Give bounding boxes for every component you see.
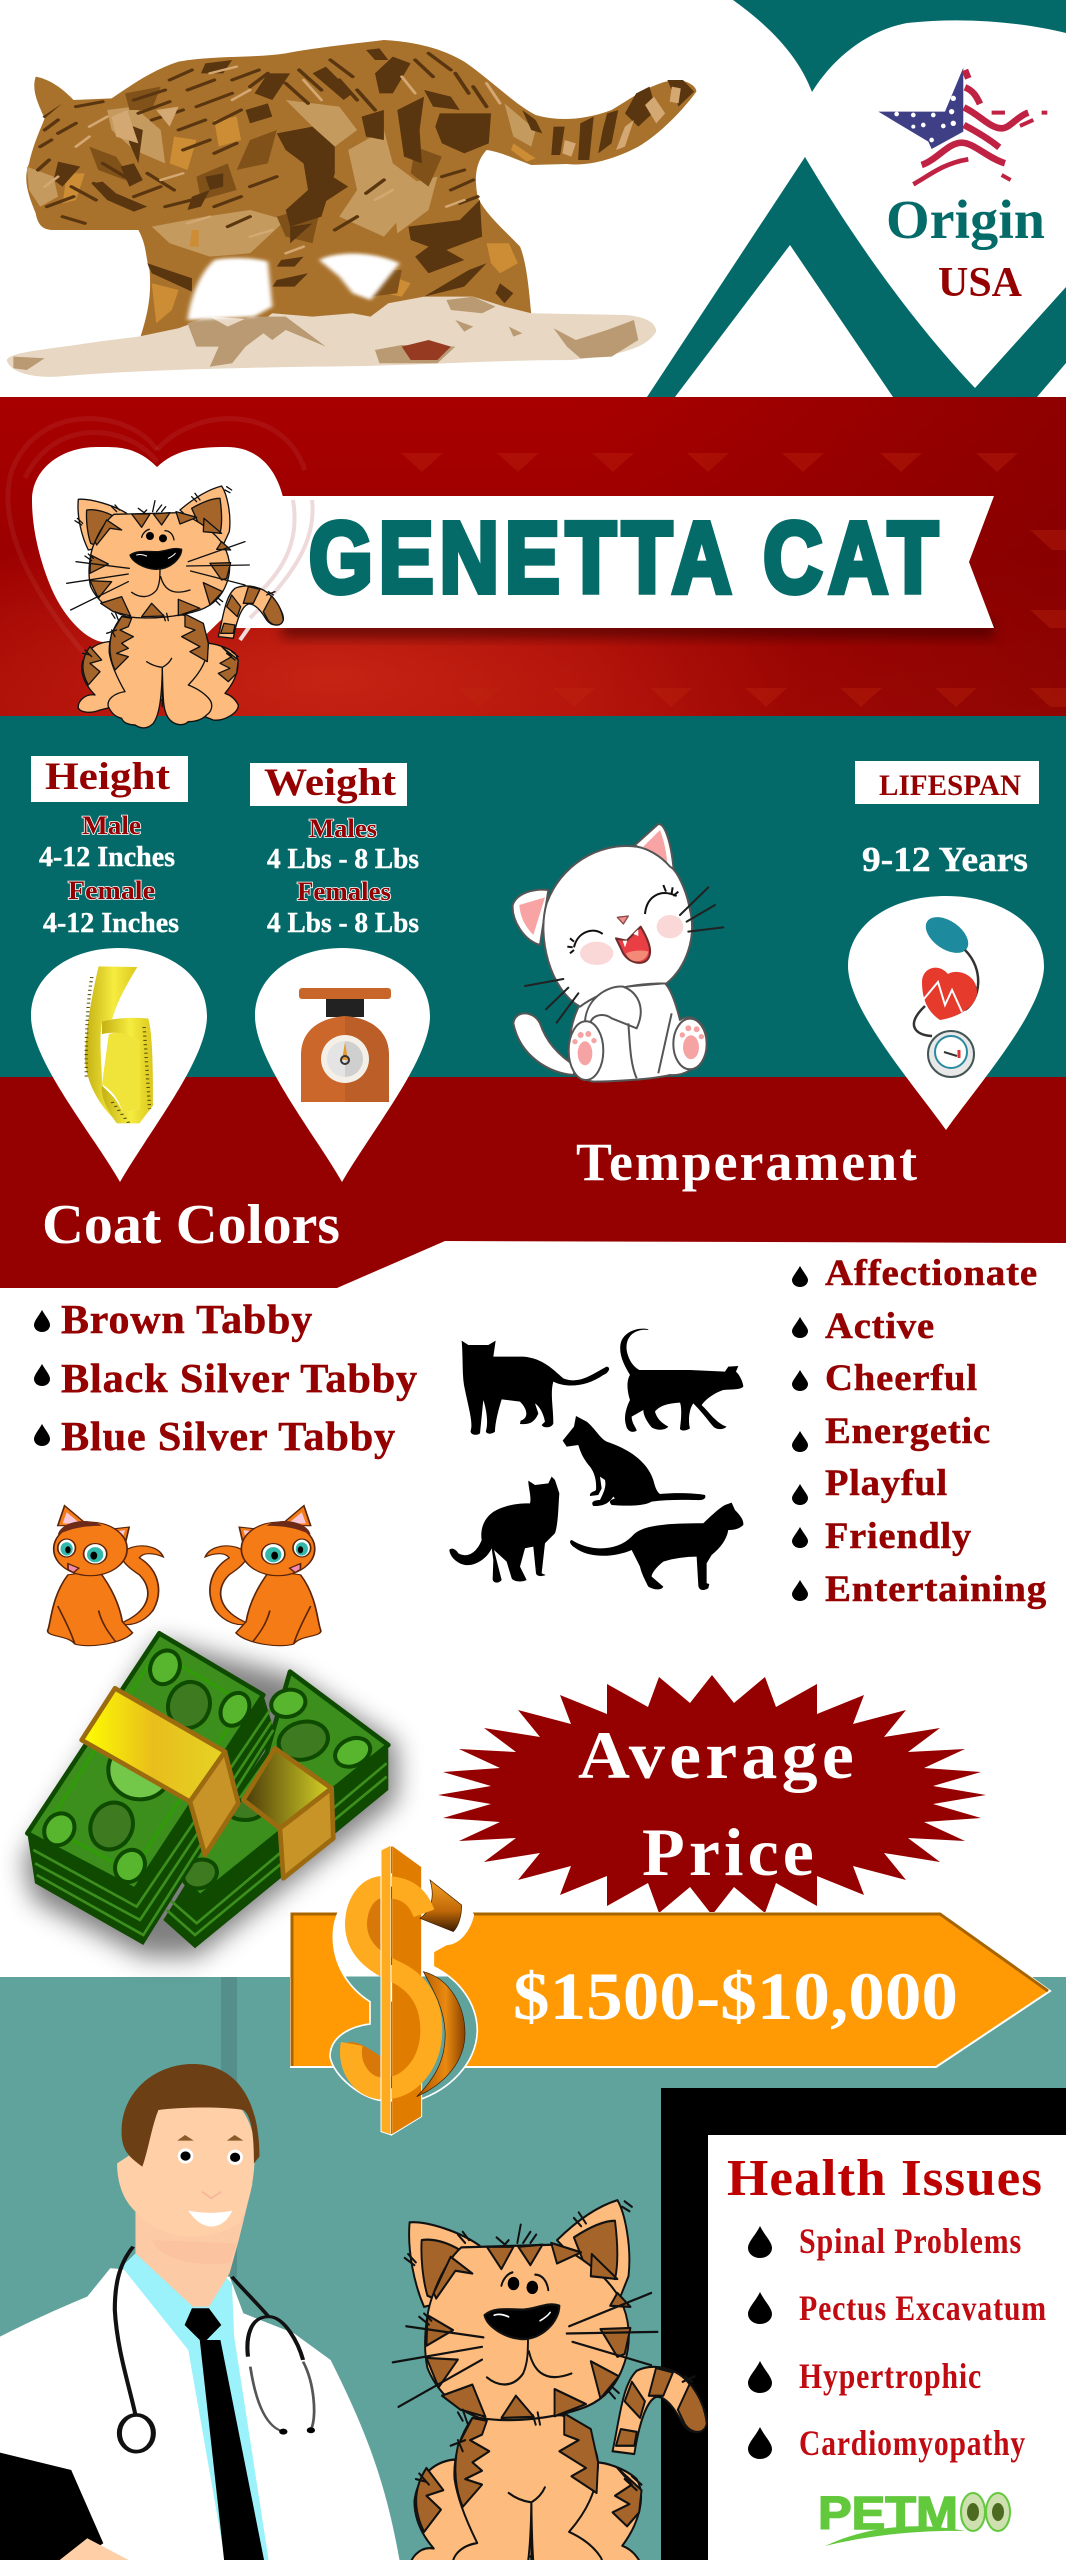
health issues list xyxy=(748,2221,1047,2463)
price text: $1500-$10,000 xyxy=(513,1958,958,2034)
photo: tabby cat walking on snow xyxy=(7,40,696,377)
temperament list: Active xyxy=(825,1306,935,1347)
temperament list: Cheerful xyxy=(825,1358,978,1399)
title ribbon xyxy=(230,496,994,628)
PETMOO logo: OO xyxy=(959,2494,1011,2538)
wall stripe xyxy=(221,1977,237,2277)
average price heading: Price xyxy=(642,1814,818,1890)
icon: USA flag star xyxy=(878,68,1047,184)
origin label: Origin xyxy=(886,189,1045,250)
icon: stacks of money xyxy=(23,1633,397,1957)
height values: Female xyxy=(68,876,155,905)
coat colors list: Blue Silver Tabby xyxy=(61,1413,396,1459)
lifespan value: 9-12 Years xyxy=(862,840,1028,879)
starburst xyxy=(438,1675,986,1915)
average price heading: Average xyxy=(578,1717,858,1793)
snow ground xyxy=(7,297,656,377)
PETMOO logo: PETM xyxy=(818,2487,958,2539)
pin: tape measure xyxy=(31,948,207,1182)
weight values: 4 Lbs - 8 Lbs xyxy=(267,908,419,939)
temperament list: Affectionate xyxy=(825,1253,1038,1294)
teal stats background xyxy=(0,716,1066,1078)
top white section background xyxy=(0,0,1066,398)
temperament list: Friendly xyxy=(825,1516,972,1557)
heart badge xyxy=(32,447,297,650)
laughing white kitten xyxy=(513,824,723,1082)
temperament list: Playful xyxy=(825,1463,948,1504)
ribbon shadow xyxy=(282,620,994,638)
PETMOO logo xyxy=(818,2487,1011,2546)
weight values: Females xyxy=(297,877,391,906)
temperament list: Entertaining xyxy=(825,1569,1047,1610)
pin: kitchen scale xyxy=(255,948,430,1182)
cartoon tabby cat mascot xyxy=(67,486,283,728)
temperament heading: Temperament xyxy=(576,1132,919,1192)
orange cats pair xyxy=(48,1506,321,1646)
weight values: 4 Lbs - 8 Lbs xyxy=(267,844,419,875)
red title banner xyxy=(0,397,1066,720)
weight label: Weight xyxy=(264,761,396,804)
height values xyxy=(39,811,179,939)
white paw patches xyxy=(187,254,400,320)
left orange cat xyxy=(48,1506,163,1646)
height values: 4-12 Inches xyxy=(43,908,179,939)
weight values xyxy=(267,814,419,939)
price arrow xyxy=(291,1913,1050,2067)
height values: 4-12 Inches xyxy=(39,842,175,873)
height values: Male xyxy=(82,811,141,840)
temperament list xyxy=(792,1253,1047,1610)
health issues heading: Health Issues xyxy=(727,2150,1043,2207)
coat colors list: Black Silver Tabby xyxy=(61,1355,418,1401)
coat colors list xyxy=(34,1296,418,1459)
average price heading xyxy=(578,1717,858,1890)
doctor illustration xyxy=(0,2064,400,2560)
right orange cat xyxy=(205,1506,321,1646)
large cartoon tabby cat xyxy=(393,2200,707,2560)
icon: 3D dollar sign xyxy=(330,1845,477,2135)
lower teal background xyxy=(0,1977,1066,2560)
title text: GENETTA CAT xyxy=(309,502,938,614)
origin label: USA xyxy=(938,260,1023,306)
health issues panel frame xyxy=(661,2088,1066,2560)
coat colors list: Brown Tabby xyxy=(61,1296,313,1342)
coat colors heading: Coat Colors xyxy=(42,1194,340,1256)
height label: Height xyxy=(45,755,170,798)
weight values: Males xyxy=(309,814,377,843)
red band with coat colors tab xyxy=(0,1077,1066,1288)
five black cat silhouettes xyxy=(449,1329,743,1590)
lifespan label xyxy=(855,761,1039,804)
height label xyxy=(31,755,188,802)
teal geometric pin shapes xyxy=(647,0,1066,397)
lifespan label: LIFESPAN xyxy=(879,769,1021,802)
temperament list: Energetic xyxy=(825,1411,991,1452)
health issues list: Hypertrophic xyxy=(799,2356,982,2396)
health issues list: Spinal Problems xyxy=(799,2221,1022,2261)
pin: heart monitor xyxy=(848,896,1044,1130)
origin label xyxy=(886,189,1045,306)
